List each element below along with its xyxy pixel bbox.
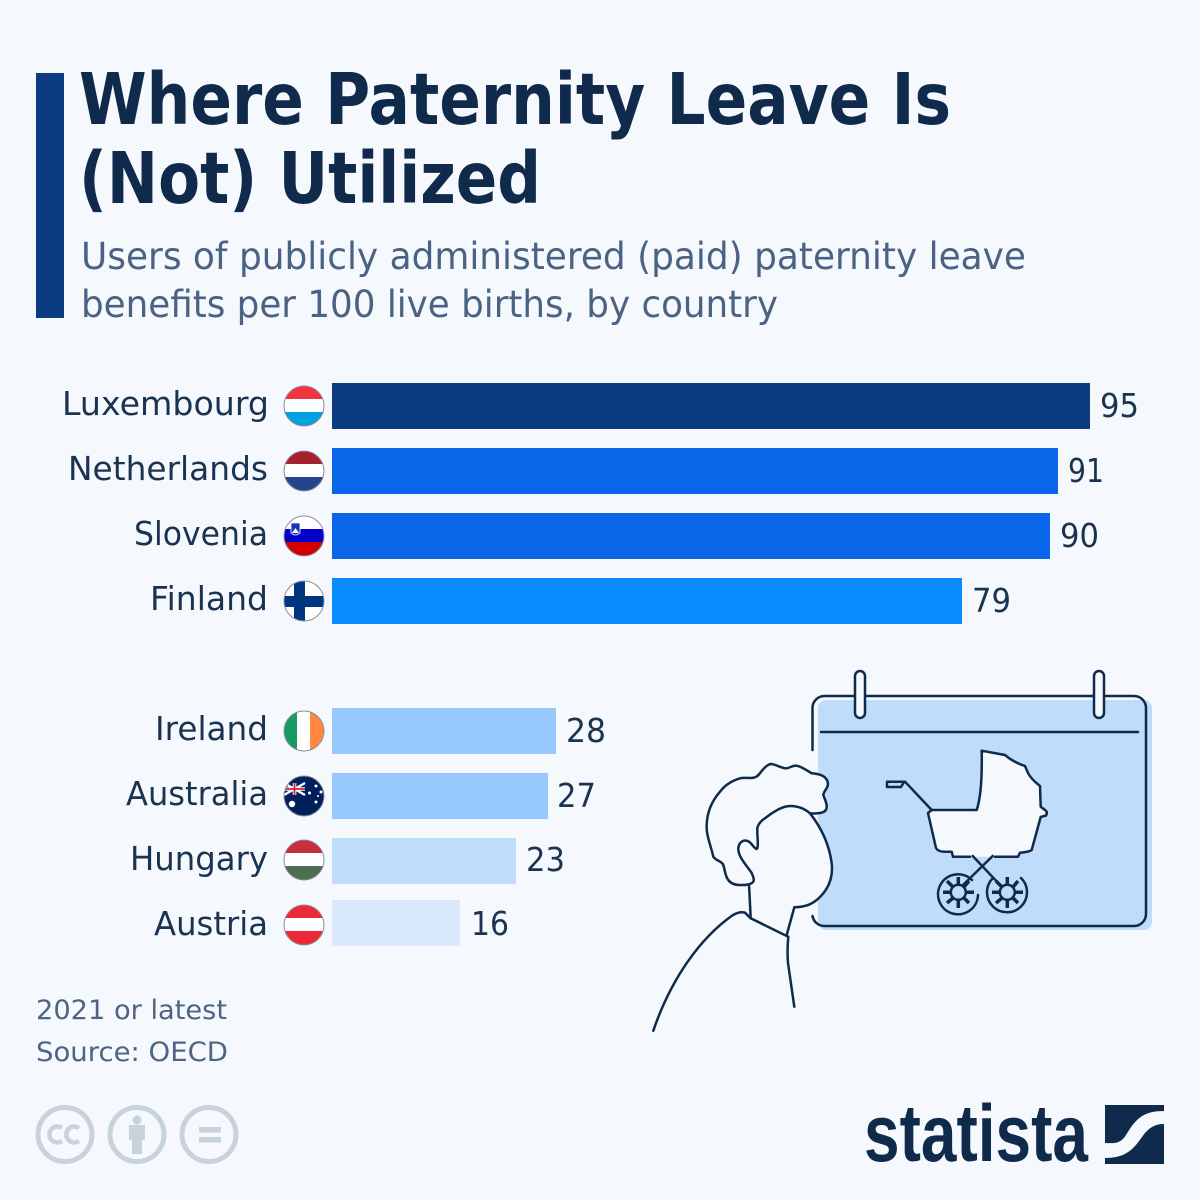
row: Austria: 16 (471, 904, 509, 943)
row: Ireland: Ireland (155, 709, 268, 748)
row: Finland: Finland (150, 579, 268, 618)
illustration: man in profile (653, 764, 832, 1031)
icons: creative commons licence (38, 1108, 236, 1162)
row: Hungary: Hungary (130, 839, 268, 878)
title (79, 58, 951, 220)
illustration: calendar with pram (653, 671, 1152, 1031)
title: Where Paternity Leave Is (79, 58, 951, 141)
row: Hungary: 23 (526, 840, 565, 879)
calendar page (812, 671, 1152, 930)
row: Austria: Austria (154, 904, 268, 943)
bar chart: lowest usage (126, 708, 606, 946)
row: Luxembourg: Luxembourg (62, 384, 269, 423)
row: Luxembourg: 95 (1100, 386, 1139, 425)
row: Slovenia: 90 (1060, 516, 1099, 555)
row: Finland (150, 578, 1011, 624)
row: Luxembourg (62, 383, 1139, 429)
row: Ireland (155, 708, 606, 754)
footnote and source (36, 995, 228, 1068)
row: Finland: 79 (972, 581, 1011, 620)
row: Hungary (130, 838, 565, 884)
accent bar (36, 73, 64, 318)
row: Slovenia: Slovenia (134, 514, 268, 553)
icon: no derivatives (182, 1108, 236, 1162)
subtitle: benefits per 100 live births, by country (81, 283, 778, 326)
row: Netherlands: Netherlands (68, 449, 268, 488)
statista logo: statista (864, 1089, 1089, 1179)
bar chart: highest usage (62, 383, 1139, 624)
row: Austria (154, 900, 509, 946)
row: Australia: Australia (126, 774, 268, 813)
row: Slovenia (134, 513, 1099, 559)
subtitle (81, 235, 1026, 326)
row: Netherlands (68, 448, 1104, 494)
row: Australia: 27 (557, 776, 596, 815)
icon: statista mark (1105, 1105, 1164, 1164)
footnote and source: 2021 or latest (36, 995, 227, 1026)
title: (Not) Utilized (79, 137, 541, 220)
icon: pram (887, 751, 1047, 914)
icon: attribution (110, 1108, 164, 1162)
row: Australia (126, 773, 596, 819)
icon: cc (38, 1108, 92, 1162)
footnote and source: Source: OECD (36, 1037, 228, 1068)
subtitle: Users of publicly administered (paid) paternity leave (81, 235, 1026, 278)
row: Ireland: 28 (566, 711, 606, 750)
row: Netherlands: 91 (1068, 451, 1104, 490)
